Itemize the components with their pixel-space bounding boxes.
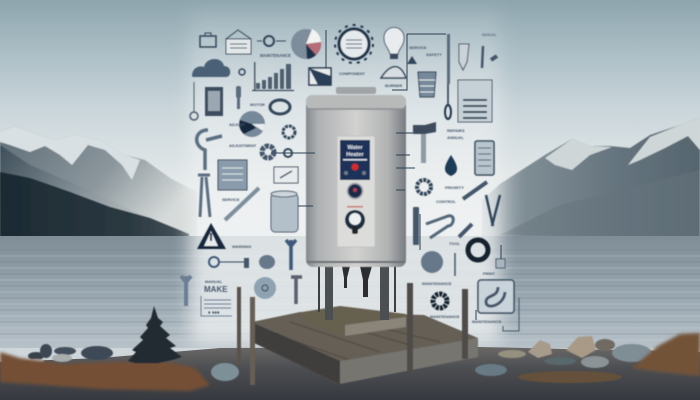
right shore rocks (475, 336, 652, 383)
left shore rocks (28, 344, 113, 363)
icon: small gear (239, 69, 245, 75)
small dial (348, 184, 362, 198)
label: tool: TOOL (449, 241, 461, 246)
icon: top wrench (482, 46, 483, 68)
icon: control wheel gauge (335, 25, 373, 63)
label: print: PRINT (483, 271, 496, 276)
label: motor: MOTOR (250, 102, 265, 107)
icon: sphere (421, 251, 443, 273)
connector: pipe panel bracket (503, 298, 519, 331)
label: adjust: ADJUST (229, 122, 246, 127)
label: under pipe panel: MAINTENANCE (472, 319, 502, 324)
icon grid: upper right (335, 25, 519, 331)
icon: sun gauge (257, 36, 286, 46)
display: Water (347, 145, 363, 151)
icon: small square (496, 259, 505, 268)
wooden pallet platform (237, 283, 478, 385)
icon: pliers right (486, 195, 500, 226)
icon: diagonal wrench (225, 188, 259, 220)
label: under gear: MAINTENANCE (430, 314, 460, 319)
round stone (211, 363, 239, 381)
icon: schematic panel (458, 80, 492, 122)
label: components: COMPONENT (339, 71, 366, 76)
pine tree (128, 306, 182, 363)
icon: small valve (259, 255, 275, 269)
icon: faucet (459, 44, 469, 70)
icon: gear black (433, 294, 447, 308)
icon: toolbox (200, 33, 216, 47)
icon: small nozzle (459, 224, 472, 237)
label: safety: SAFETY (426, 52, 442, 57)
icon: rod (413, 207, 419, 245)
label: drop: PRIORITY (445, 185, 464, 190)
icon: check box (274, 167, 298, 183)
icon: dial with pointer (209, 257, 249, 268)
label: annual: ANNUAL (447, 135, 464, 140)
icon: long rod (445, 34, 451, 119)
sky (0, 0, 700, 240)
icon: axe hammer (413, 122, 436, 163)
icon: radial chart (239, 111, 265, 137)
icon: cog (262, 146, 274, 158)
icon: blue wrench (286, 240, 296, 270)
icon: flame coil (381, 67, 406, 78)
icon: sign board (226, 30, 251, 54)
heading: maintenance: MAINTENANCE (260, 53, 291, 58)
icon: clipboard (475, 141, 494, 175)
icon: large wrench hook (197, 130, 222, 170)
icon: checklist panel (218, 160, 247, 190)
dry grass left (0, 352, 210, 391)
red label (347, 206, 363, 208)
manual: make: MANUAL (205, 279, 223, 284)
icon: nozzle (463, 182, 487, 199)
icon: clamp (491, 56, 497, 60)
control panel (337, 136, 375, 247)
icon: pie chart (291, 29, 321, 59)
icon: cloud (192, 59, 230, 77)
icon: bucket filter (418, 72, 436, 97)
display (340, 140, 370, 180)
water heater tank (306, 87, 406, 267)
connector lines (271, 30, 501, 320)
label: wrench: ADJUSTMENT (229, 143, 257, 148)
dry grass right (632, 333, 700, 376)
icon: thermometer bulb (190, 82, 198, 120)
icon: black ring (468, 240, 488, 260)
icon: canister (271, 191, 298, 232)
icon: triangle arrow (407, 56, 417, 64)
icon: water drop (445, 155, 457, 176)
left mountains (0, 126, 197, 237)
label: maintenance right: MAINTENANCE (422, 281, 452, 286)
icon: light bulb (384, 28, 404, 59)
icon grid: upper left (181, 29, 331, 316)
icon: piston (236, 86, 241, 109)
icon: tablet (205, 87, 223, 116)
large dial (345, 210, 365, 230)
label: pliers: SERVICE (222, 197, 240, 202)
icon: disc (254, 277, 276, 299)
icon: gear (283, 126, 295, 138)
icon: pliers (198, 175, 210, 217)
ground (0, 347, 700, 400)
left forest hill (0, 172, 189, 237)
display: Heater (346, 152, 365, 158)
manual: make (201, 279, 232, 316)
posts (237, 287, 241, 365)
label: hammer: REPAIRS (447, 128, 465, 133)
label: warning: WARNING (232, 244, 251, 249)
tank stand legs (318, 262, 396, 320)
manual: make: ♦ ♦♦♦ (208, 310, 220, 316)
label: heading top right: MANUAL (482, 33, 497, 37)
icon: node (284, 149, 292, 157)
label: bulb: SERVICE (409, 45, 427, 50)
manual: make: MAKE (204, 285, 228, 294)
haze behind icons (190, 10, 500, 345)
icon: gear (417, 180, 431, 194)
icon: small pin (454, 253, 456, 276)
icon: t-handle tool (291, 277, 302, 304)
bar chart (252, 62, 294, 91)
icon: flange (270, 100, 290, 114)
icon: warning triangle (197, 223, 226, 249)
label: flame: BURNER (385, 83, 402, 88)
lake (0, 236, 700, 348)
label: control: CONTROL (436, 199, 456, 204)
icon: envelope (309, 68, 331, 85)
icon: small spanner (181, 276, 191, 306)
icon: pipe panel (478, 280, 514, 313)
right mountains (482, 118, 700, 237)
icon: c clamp (426, 216, 453, 238)
